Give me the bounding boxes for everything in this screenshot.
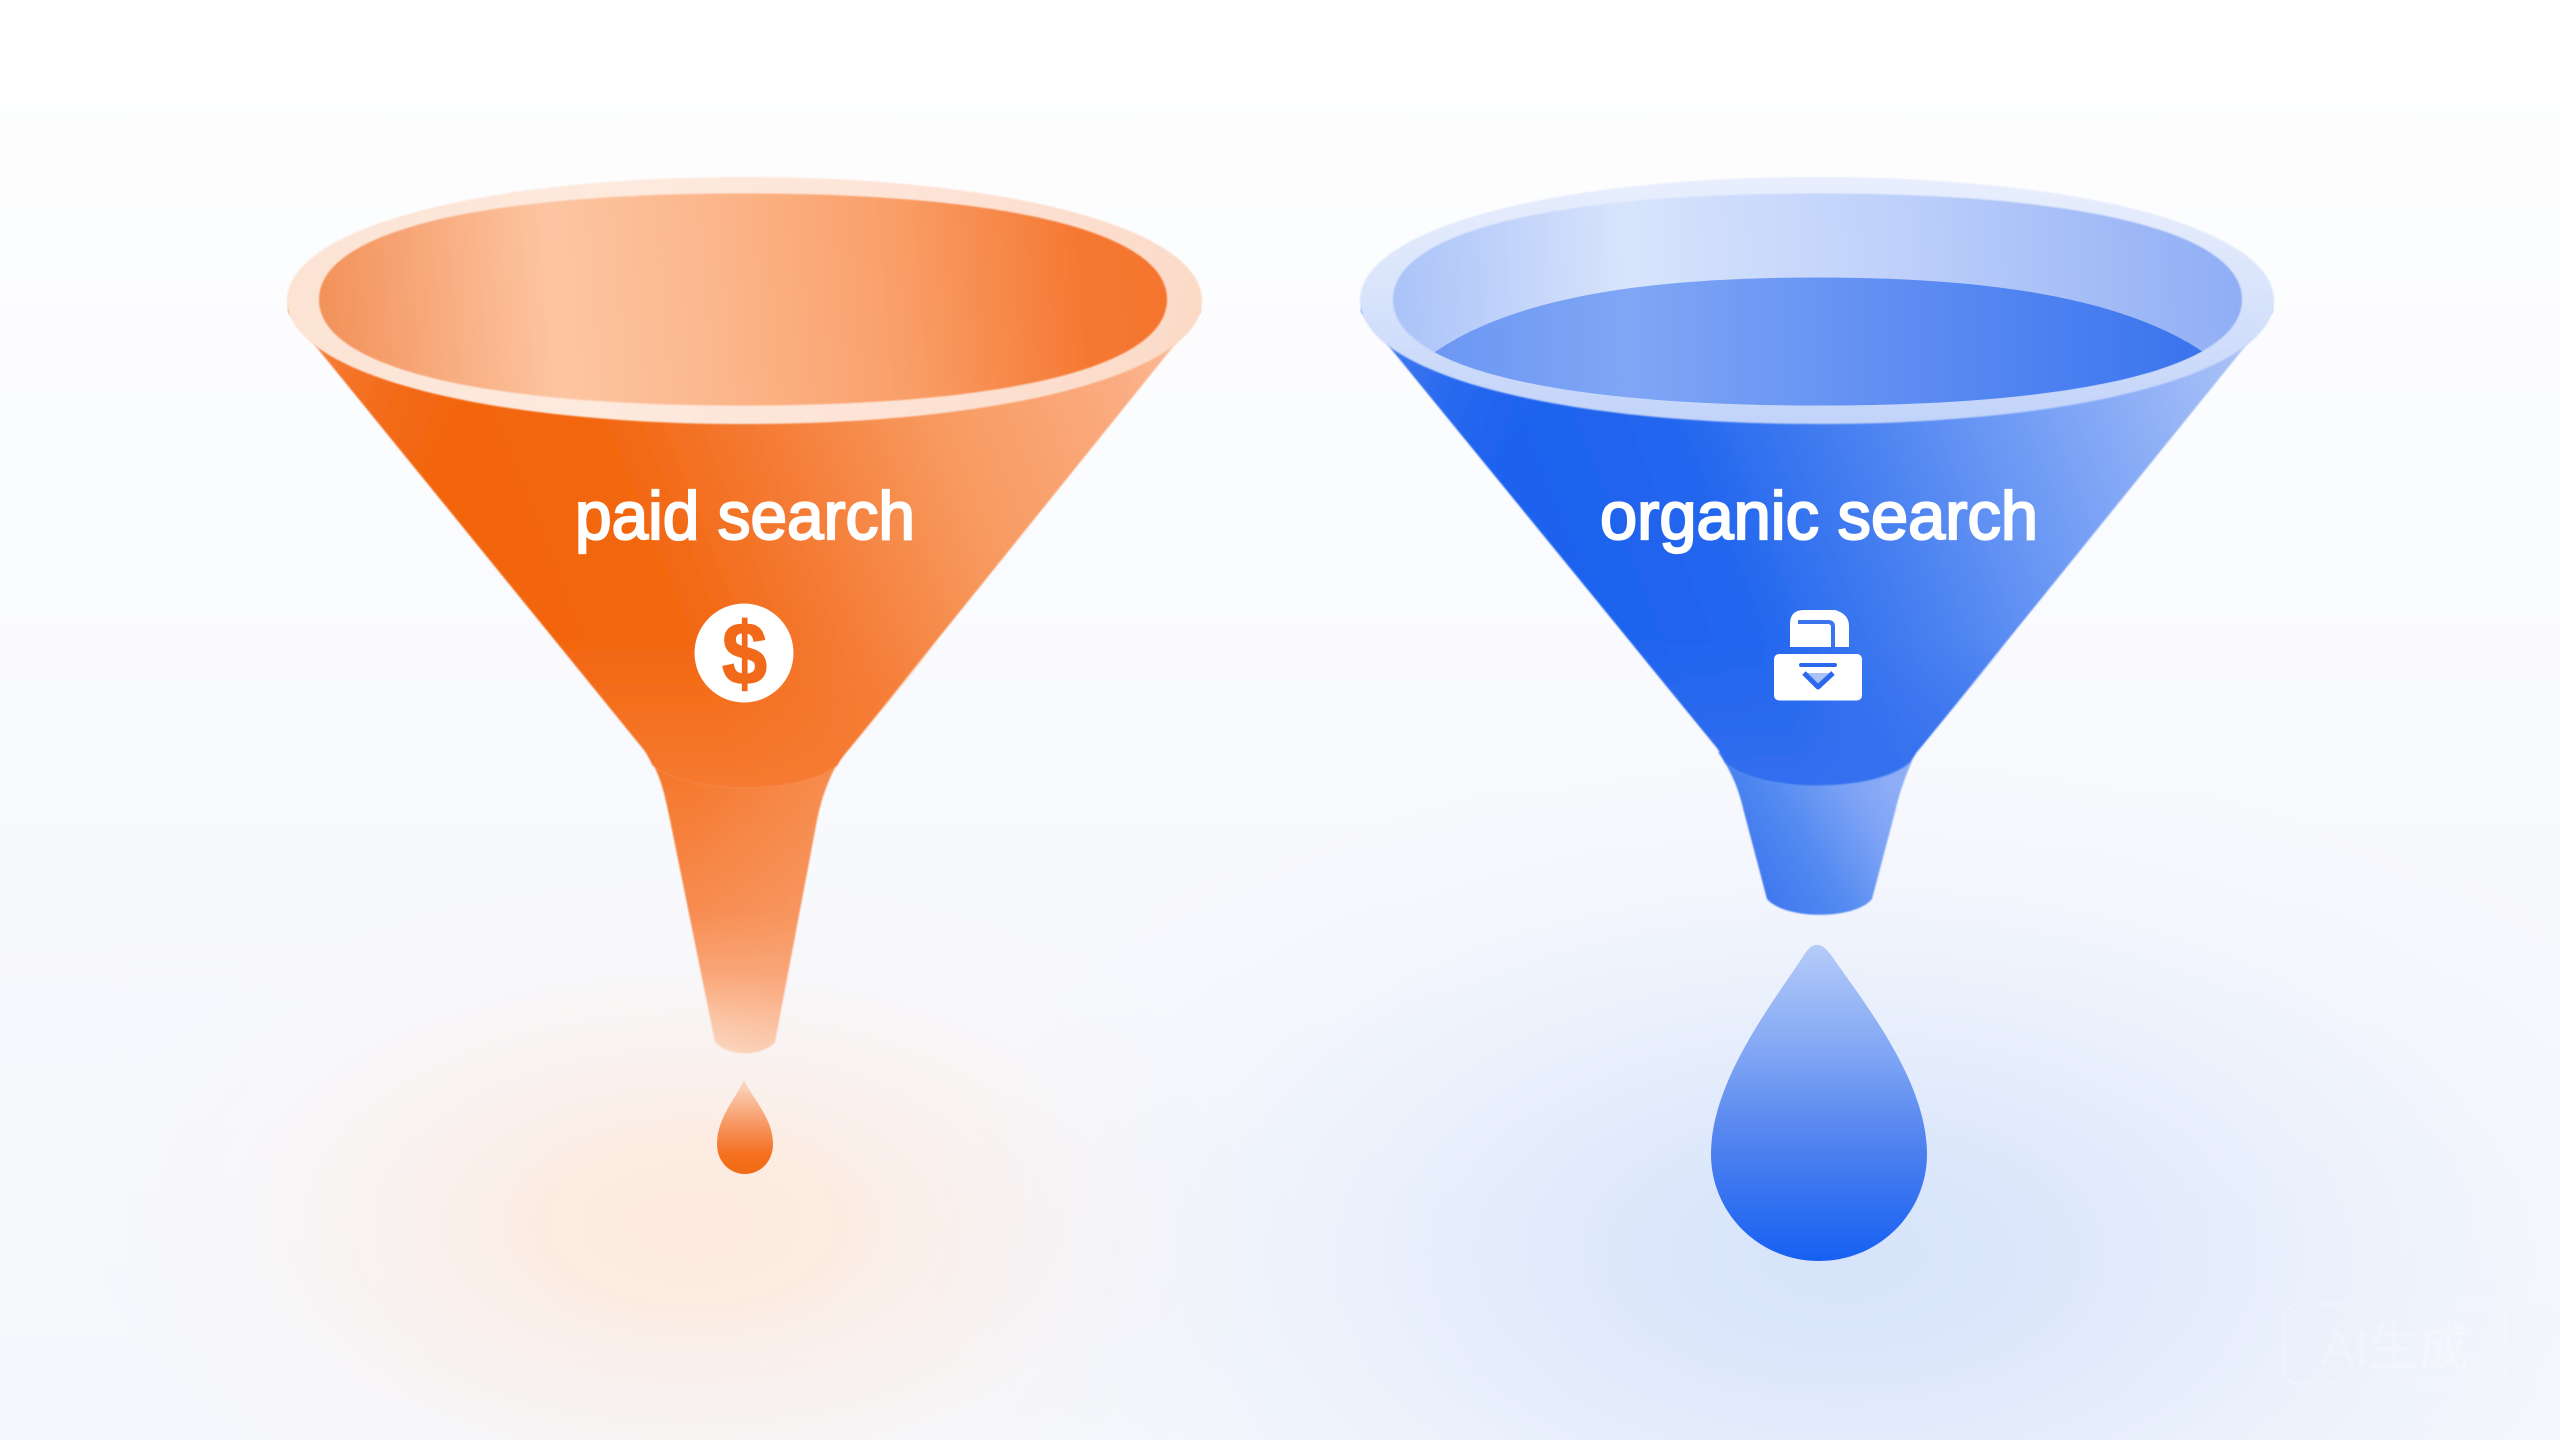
watermark: AI生成 — [2321, 1320, 2469, 1376]
large blue drop — [1711, 945, 1927, 1261]
small orange drop — [717, 1080, 773, 1174]
funnel cone: orange — [288, 300, 1201, 787]
panel: paid search funnel — [287, 177, 1202, 1174]
water surface in funnel — [1434, 278, 2202, 406]
funnel rim: orange — [287, 177, 1202, 424]
label: organic search: organic search — [1600, 478, 2038, 554]
label: paid search: paid search — [575, 478, 915, 554]
panel: organic search funnel — [1360, 177, 2274, 1261]
funnel cone: blue — [1361, 300, 2273, 785]
funnel interior: orange — [319, 194, 1167, 406]
icon: dollar coin: $ — [722, 604, 767, 703]
funnel spout: blue — [1718, 752, 1916, 915]
funnel interior: blue — [1393, 194, 2242, 406]
funnel rim: blue — [1360, 177, 2274, 424]
icon: dollar coin — [694, 604, 794, 703]
watermark — [2284, 1304, 2506, 1384]
icon: open padlock — [1774, 610, 1862, 700]
funnel spout: orange — [648, 755, 842, 1053]
